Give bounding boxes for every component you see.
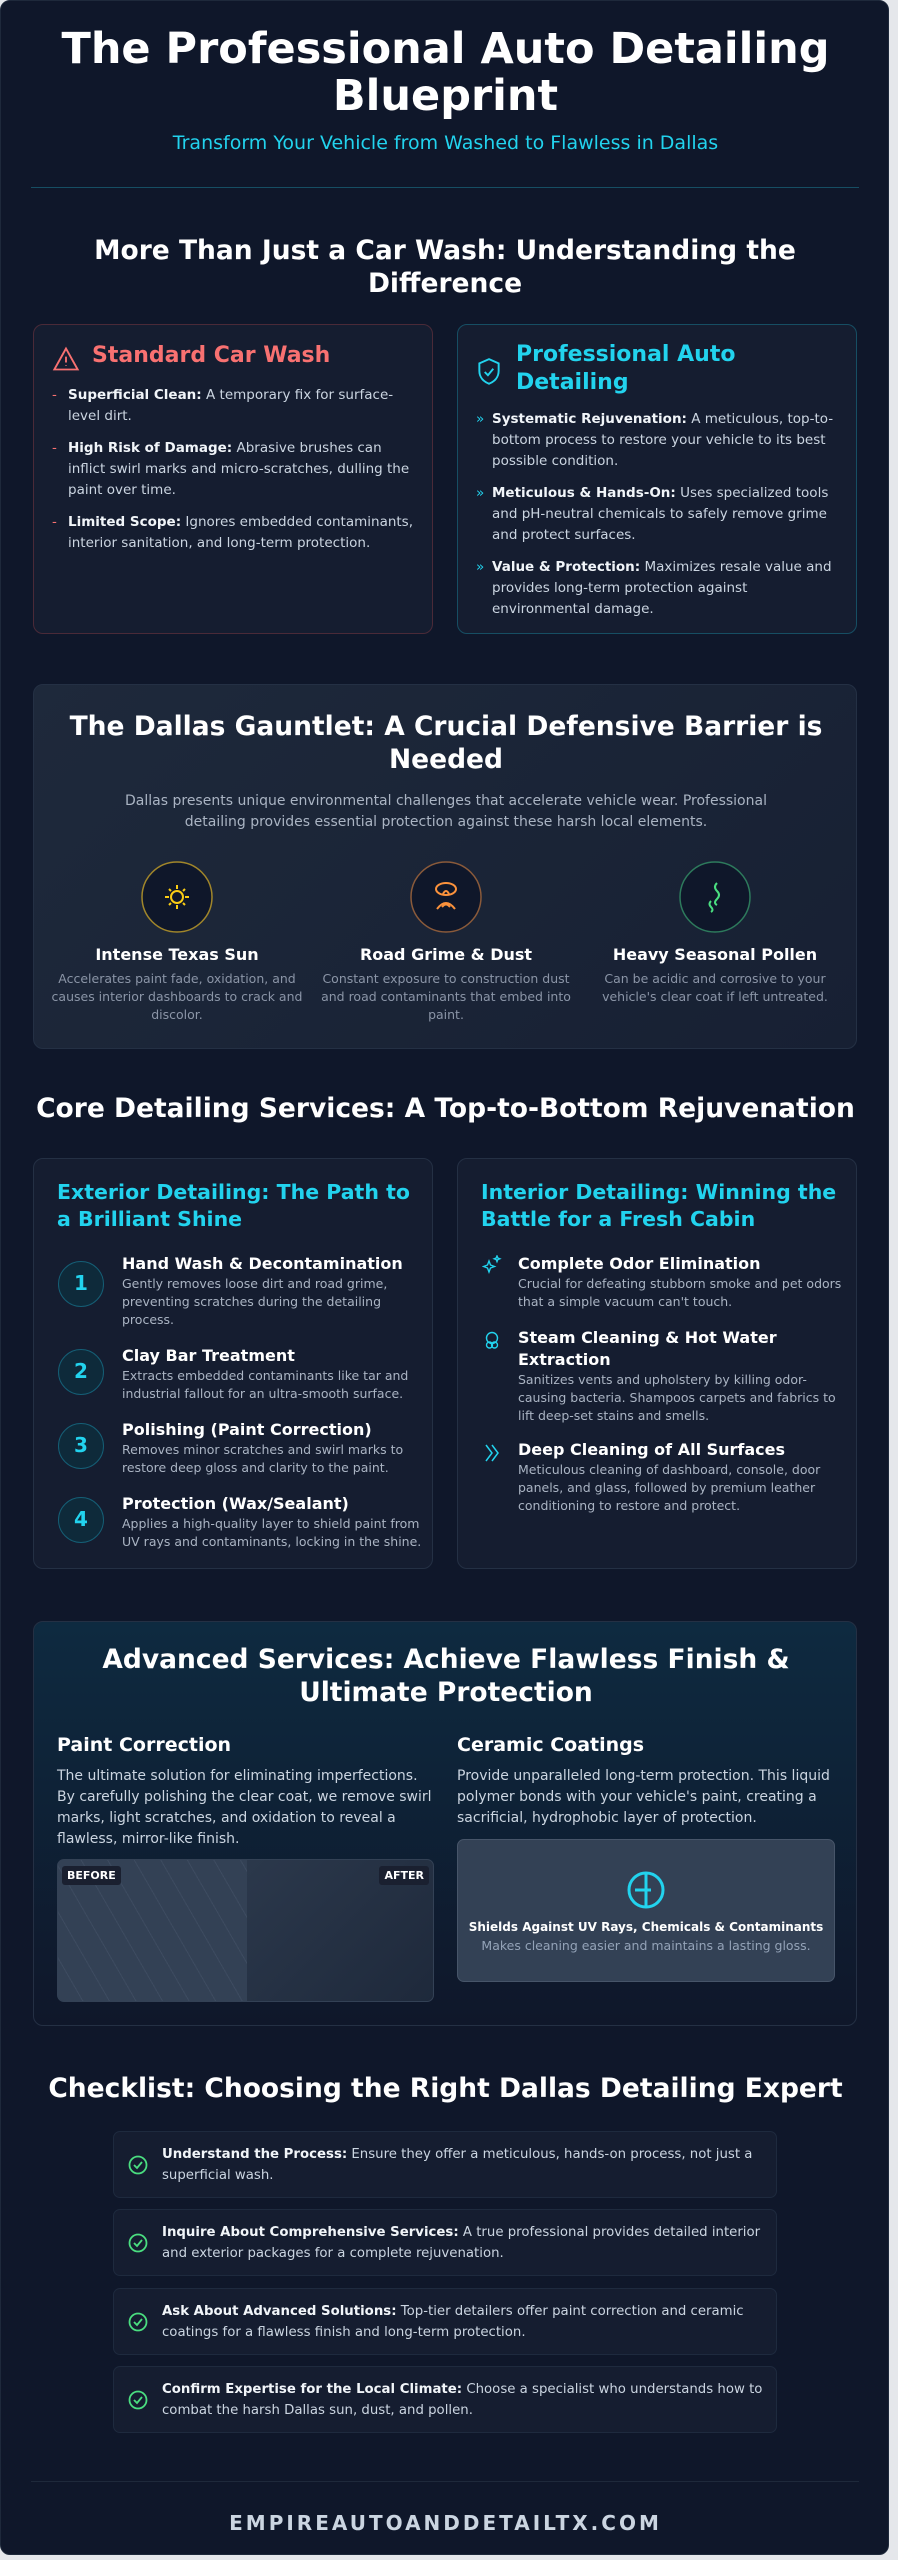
panel: professional detailing bbox=[457, 324, 857, 634]
item: surfaces: Deep Cleaning of All Surfaces bbox=[518, 1440, 785, 1459]
heading: Professional Auto bbox=[516, 342, 735, 367]
panel: standard car wash: High Risk of Damage: Abrasive brushes can inflict swirl marks and micro-scratches, dulling the paint over time. bbox=[68, 440, 409, 498]
heading: The Dallas Gauntlet: A Crucial Defensive Barrier is Needed bbox=[70, 711, 822, 775]
item: grime bbox=[321, 861, 571, 1022]
checklist item 3 bbox=[113, 2288, 777, 2355]
step 1: Gently removes loose dirt and road grime, preventing scratches during the detailing process. bbox=[122, 1276, 387, 1327]
panel: professional detailing: » bbox=[476, 559, 484, 575]
step 1 bbox=[58, 1254, 403, 1327]
intro text: Dallas presents unique environmental challenges that accelerate vehicle wear. Professional detailing provides essential protection against these harsh local elements. bbox=[125, 793, 767, 830]
heading: Exterior Detailing: The Path to a Brilliant Shine bbox=[57, 1180, 410, 1231]
item: grime: Road Grime & Dust bbox=[360, 945, 532, 964]
item: sun bbox=[52, 861, 302, 1022]
item: grime: Constant exposure to construction dust and road contaminants that embed into paint. bbox=[321, 971, 571, 1022]
ceramic coatings: Provide unparalleled long-term protection. This liquid polymer bonds with your vehicle's paint, creating a sacrificial, hydrophobic layer of protection. bbox=[457, 1768, 830, 1826]
panel: standard car wash: - bbox=[52, 514, 57, 530]
checklist item 2: Inquire About Comprehensive Services: A true professional provides detailed interior and exterior packages for a complete rejuvenation. bbox=[162, 2225, 760, 2261]
paint correction: Paint Correction bbox=[57, 1734, 231, 1756]
step 4: 4 bbox=[74, 1507, 88, 1531]
panel: professional detailing: » bbox=[476, 485, 484, 501]
checklist item 3: Ask About Advanced Solutions: Top-tier detailers offer paint correction and ceramic coatings for a flawless finish and long-term protection. bbox=[162, 2304, 744, 2340]
step 3: 3 bbox=[74, 1433, 88, 1457]
before/after visual bbox=[57, 1859, 434, 2002]
item: steam: Sanitizes vents and upholstery by killing odor-causing bacteria. Shampoos carpets and fabrics to lift deep-set stains and smells. bbox=[518, 1372, 836, 1423]
step 2 bbox=[58, 1346, 408, 1401]
panel: exterior bbox=[33, 1158, 433, 1569]
heading bbox=[516, 342, 735, 395]
item: steam: Steam Cleaning & Hot Water Extraction bbox=[518, 1328, 777, 1369]
paint correction bbox=[56, 1734, 432, 1847]
step 2: 2 bbox=[74, 1359, 88, 1383]
panel: standard car wash: Limited Scope: Ignores embedded contaminants, interior sanitation, and long-term protection. bbox=[68, 514, 413, 551]
icon: warning bbox=[52, 346, 80, 370]
item: sun: Accelerates paint fade, oxidation, and causes interior dashboards to crack and discolor. bbox=[52, 971, 302, 1022]
checklist item 1: Understand the Process: Ensure they offer a meticulous, hands-on process, not just a superficial wash. bbox=[162, 2147, 752, 2183]
step 4: Protection (Wax/Sealant) bbox=[122, 1494, 349, 1513]
item: pollen: Heavy Seasonal Pollen bbox=[613, 945, 817, 964]
heading: Detailing bbox=[516, 370, 629, 395]
item: odor: Complete Odor Elimination bbox=[518, 1254, 761, 1273]
panel: advanced services bbox=[33, 1621, 857, 2026]
icon: shield bbox=[478, 358, 500, 385]
step 4: Applies a high-quality layer to shield paint from UV rays and contaminants, locking in the shine. bbox=[122, 1516, 421, 1549]
item: sun: Intense Texas Sun bbox=[95, 945, 259, 964]
step 3 bbox=[58, 1420, 403, 1475]
heading: Standard Car Wash bbox=[92, 343, 330, 368]
item: surfaces bbox=[486, 1440, 820, 1513]
heading: difference: More Than Just a Car Wash: Understanding the Difference bbox=[94, 235, 796, 299]
heading: Interior Detailing: Winning the Battle for a Fresh Cabin bbox=[481, 1180, 836, 1231]
list: Systematic Rejuvenation: A meticulous, top-to-bottom process to restore your vehicle to its best possible condition. bbox=[492, 411, 833, 469]
subtitle: Transform Your Vehicle from Washed to Flawless in Dallas bbox=[173, 132, 718, 154]
item: odor: Crucial for defeating stubborn smoke and pet odors that a simple vacuum can't touch. bbox=[518, 1276, 841, 1309]
step 3: Removes minor scratches and swirl marks to restore deep gloss and clarity to the paint. bbox=[122, 1442, 403, 1475]
step 1: 1 bbox=[74, 1271, 88, 1295]
footer: EMPIREAUTOANDDETAILTX.COM bbox=[229, 2511, 662, 2535]
list: » bbox=[476, 411, 484, 427]
item: pollen bbox=[602, 861, 828, 1004]
panel: professional detailing: Value & Protection: Maximizes resale value and provides long-term protection against environmental damage. bbox=[492, 559, 832, 617]
item: odor bbox=[482, 1254, 841, 1309]
icon: dust bbox=[410, 861, 482, 933]
heading: Advanced Services: Achieve Flawless Finish & Ultimate Protection bbox=[102, 1644, 790, 1708]
list: - bbox=[52, 387, 57, 403]
panel: standard car wash bbox=[33, 324, 433, 634]
title: Blueprint bbox=[333, 71, 558, 121]
panel: standard car wash: - bbox=[52, 440, 57, 456]
checklist item 1 bbox=[113, 2131, 777, 2198]
step 2: Extracts embedded contaminants like tar and industrial fallout for an ultra-smooth surface. bbox=[122, 1368, 408, 1401]
before/after visual: AFTER bbox=[384, 1869, 424, 1882]
checklist item 2 bbox=[113, 2209, 777, 2276]
ceramic coatings: Ceramic Coatings bbox=[457, 1734, 644, 1756]
heading: core services: Core Detailing Services: A Top-to-Bottom Rejuvenation bbox=[36, 1093, 855, 1124]
step 1: Hand Wash & Decontamination bbox=[122, 1254, 403, 1273]
step 3: Polishing (Paint Correction) bbox=[122, 1420, 372, 1439]
icon: sun bbox=[141, 861, 213, 933]
ceramic callout: Shields Against UV Rays, Chemicals & Contaminants bbox=[469, 1920, 823, 1934]
ceramic callout bbox=[457, 1839, 835, 1982]
list: Superficial Clean: A temporary fix for surface-level dirt. bbox=[68, 387, 393, 424]
item: pollen: Can be acidic and corrosive to your vehicle's clear coat if left untreated. bbox=[602, 971, 828, 1004]
step 4 bbox=[58, 1494, 421, 1549]
title bbox=[61, 24, 830, 121]
panel: interior bbox=[457, 1158, 857, 1569]
checklist item 4 bbox=[113, 2366, 777, 2433]
panel: dallas gauntlet bbox=[33, 684, 857, 1049]
item: surfaces: Meticulous cleaning of dashboard, console, door panels, and glass, followed by premium leather conditioning to restore and protect. bbox=[518, 1462, 820, 1513]
ceramic coatings bbox=[457, 1734, 830, 1826]
item: steam bbox=[486, 1328, 836, 1423]
before/after visual: BEFORE bbox=[67, 1869, 116, 1882]
panel: professional detailing: Meticulous & Hands-On: Uses specialized tools and pH-neutral chemicals to safely remove grime and protect surfaces. bbox=[492, 485, 828, 543]
step 2: Clay Bar Treatment bbox=[122, 1346, 295, 1365]
paint correction: The ultimate solution for eliminating imperfections. By carefully polishing the clear coat, we remove swirl marks, light scratches, and oxidation to reveal a flawless, mirror-like finish. bbox=[57, 1768, 432, 1847]
heading: checklist: Checklist: Choosing the Right Dallas Detailing Expert bbox=[48, 2073, 843, 2104]
ceramic callout: Makes cleaning easier and maintains a lasting gloss. bbox=[481, 1938, 811, 1953]
icon: pollen bbox=[679, 861, 751, 933]
checklist item 4: Confirm Expertise for the Local Climate: Choose a specialist who understands how to combat the harsh Dallas sun, dust, and pollen. bbox=[162, 2382, 762, 2418]
title: The Professional Auto Detailing bbox=[61, 24, 830, 74]
